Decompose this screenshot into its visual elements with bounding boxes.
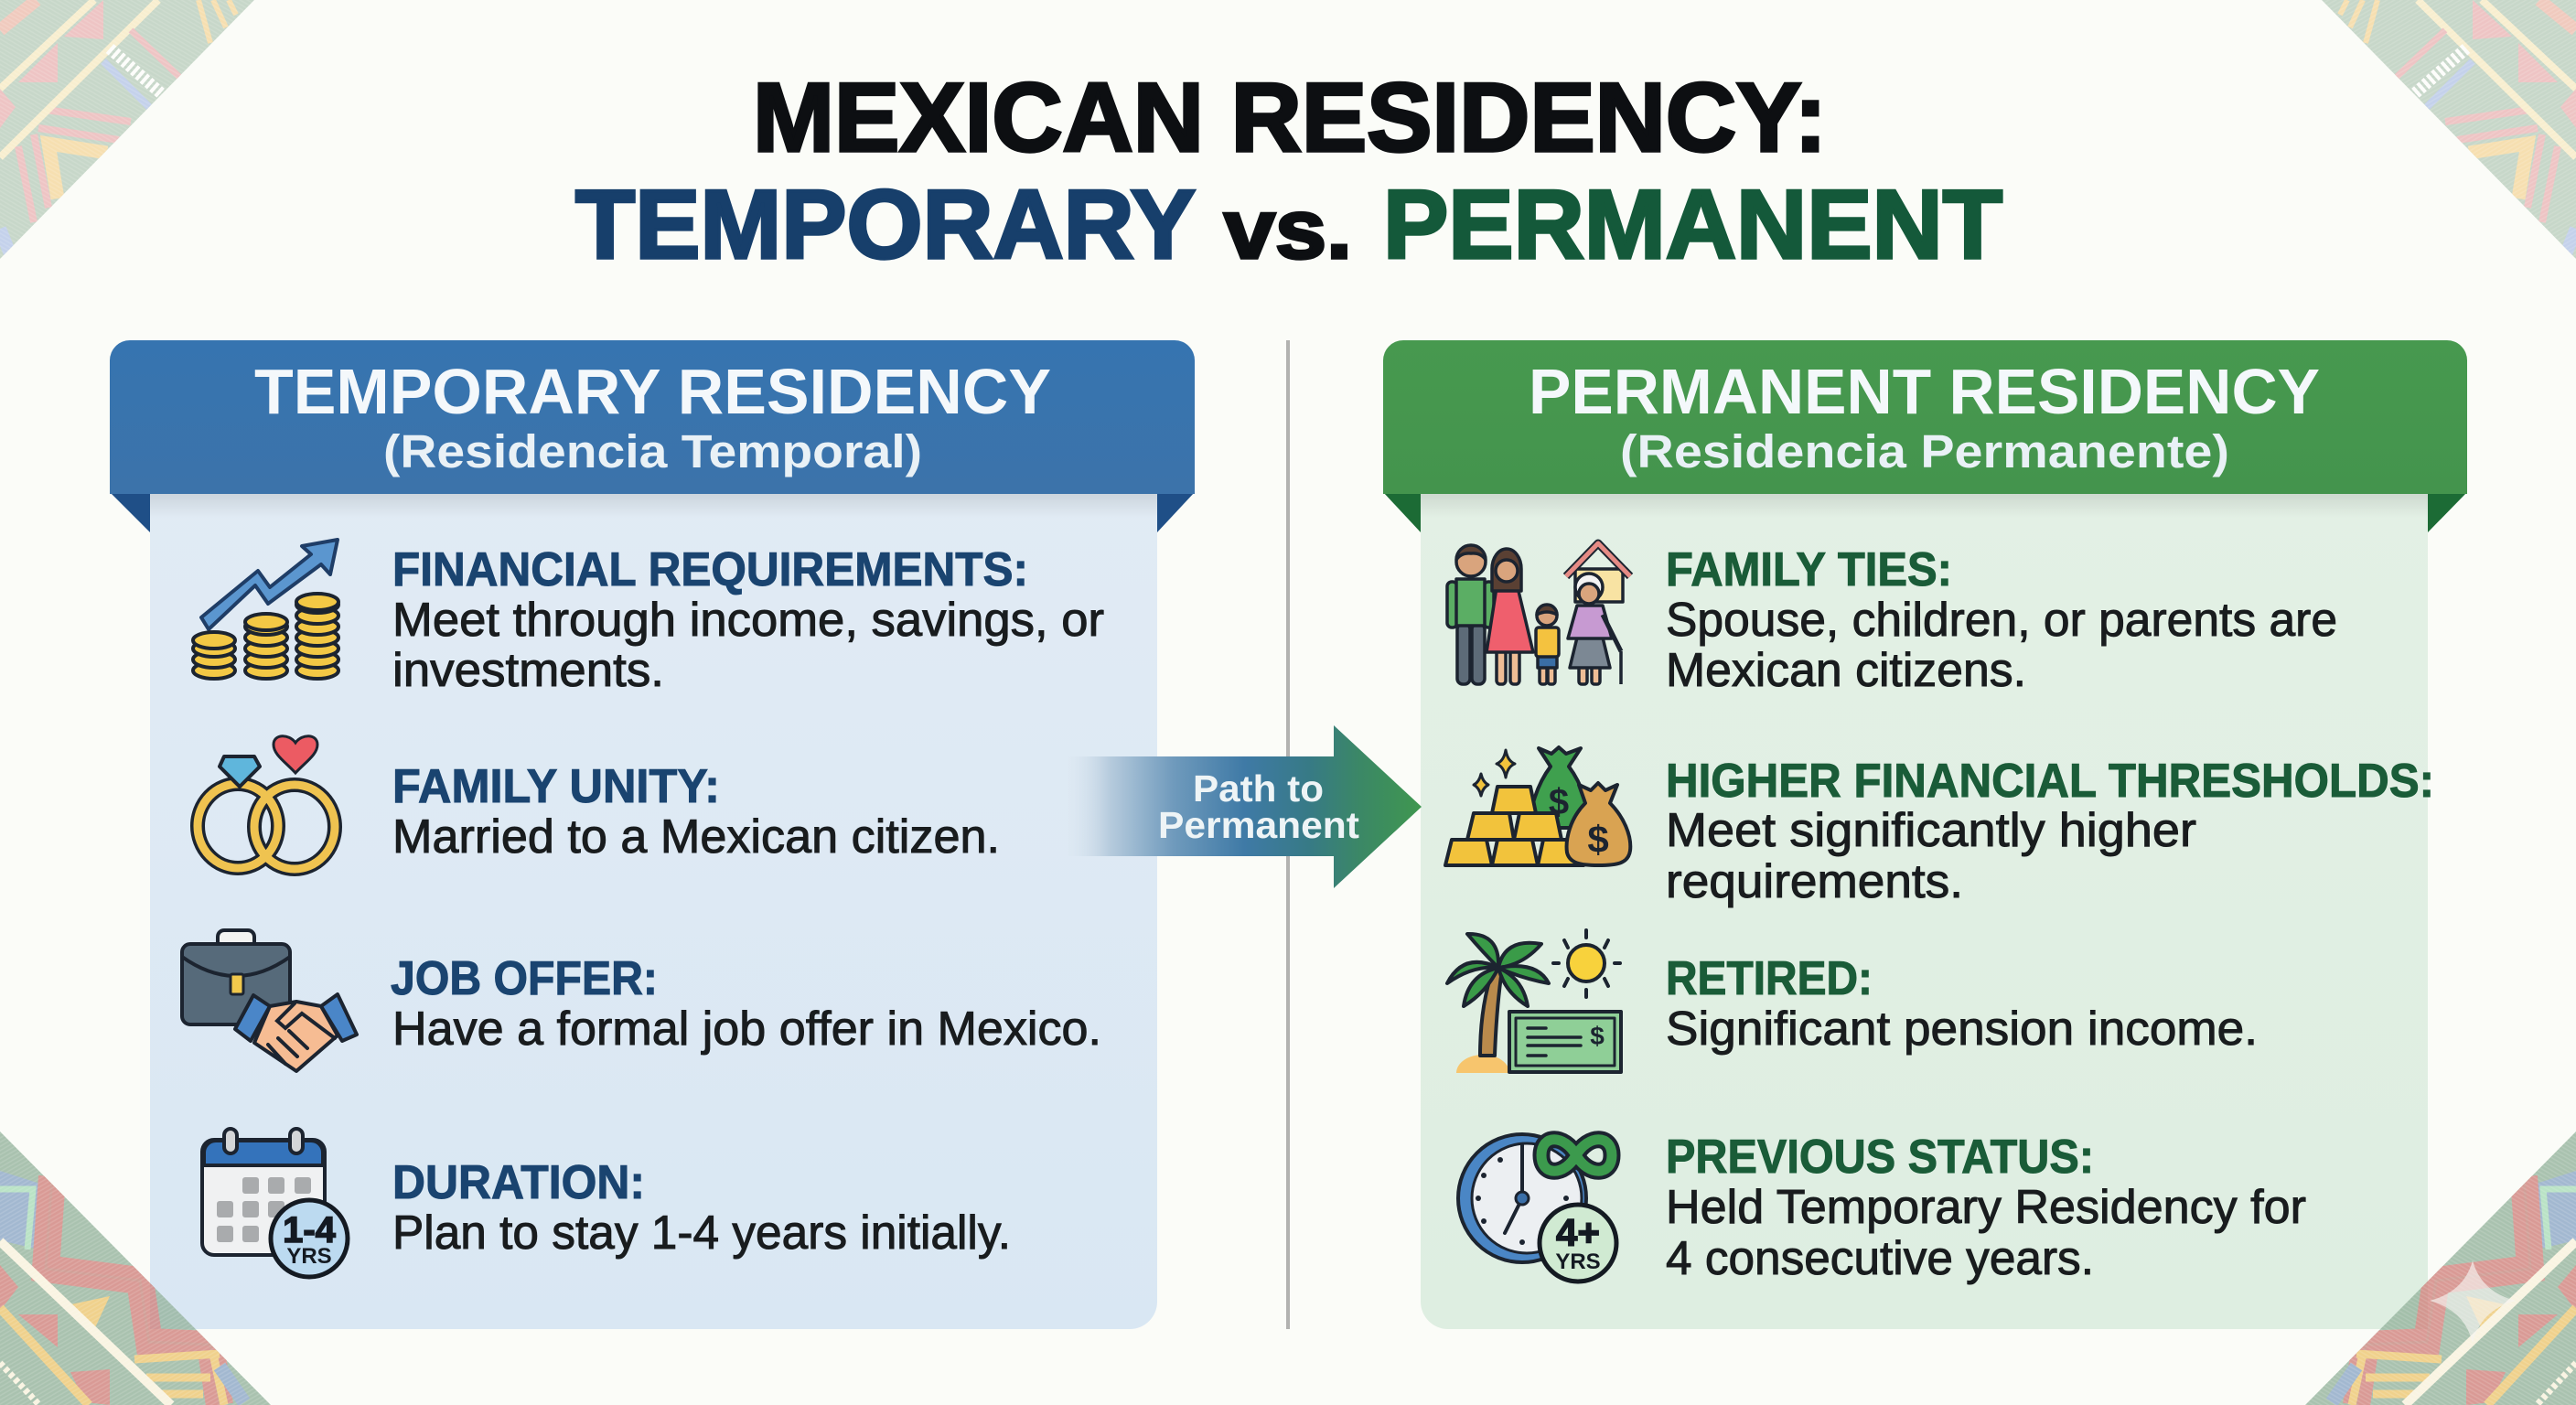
icon: family and house — [1447, 543, 1630, 684]
description: Meet significantly higher — [1666, 804, 2196, 857]
arrow: path to permanent — [1068, 725, 1422, 888]
description: investments. — [392, 644, 664, 697]
title word: permanent: PERMANENT — [1383, 169, 2002, 279]
description: Mexican citizens. — [1666, 644, 2026, 697]
center divider — [1286, 340, 1290, 1329]
header banner — [1383, 340, 2467, 494]
description — [1666, 1181, 2306, 1285]
icon: clock, infinity and 4+ yrs badge: 4+ — [1556, 1211, 1600, 1254]
heading: FINANCIAL REQUIREMENTS: — [392, 543, 1028, 596]
arrow label — [1158, 767, 1359, 846]
header subtitle: (Residencia Temporal) — [383, 425, 922, 477]
description: 4 consecutive years. — [1666, 1232, 2094, 1285]
item: job offer — [182, 930, 1101, 1071]
sparkle watermark — [2430, 1260, 2516, 1343]
title word: temporary: TEMPORARY — [575, 169, 1196, 279]
heading: RETIRED: — [1666, 952, 1873, 1005]
icon: clock, infinity and 4+ yrs badge — [1458, 1134, 1616, 1282]
description: Plan to stay 1-4 years initially. — [392, 1207, 1011, 1260]
description — [1666, 804, 2196, 908]
item: financial requirements — [193, 540, 1104, 697]
heading: PREVIOUS STATUS: — [1666, 1131, 2094, 1184]
description: Significant pension income. — [1666, 1003, 2258, 1056]
description: Meet through income, savings, or — [392, 594, 1104, 647]
description: requirements. — [1666, 855, 1963, 908]
title word: vs.: vs. — [1224, 183, 1352, 276]
heading: HIGHER FINANCIAL THRESHOLDS: — [1666, 755, 2434, 808]
icon: calendar with 1-4 yrs badge: 1-4 — [283, 1210, 337, 1250]
icon: gold bars and money bags: $ — [1549, 782, 1569, 822]
arrow label: Path to — [1193, 767, 1324, 810]
ribbon folds — [110, 492, 1195, 532]
header banner — [110, 340, 1195, 494]
panel body — [150, 485, 1157, 1329]
description: Have a formal job offer in Mexico. — [392, 1003, 1101, 1056]
description — [392, 594, 1104, 697]
description — [1666, 594, 2337, 697]
panel: permanent residency — [1383, 340, 2467, 1329]
panel body — [1421, 485, 2428, 1329]
header title: TEMPORARY RESIDENCY — [254, 356, 1051, 427]
item: retired — [1447, 930, 2258, 1073]
header subtitle: (Residencia Permanente) — [1620, 425, 2229, 477]
ribbon folds — [1383, 492, 2467, 532]
icon: briefcase and handshake — [182, 930, 357, 1071]
decorative textile corner: top right — [2302, 0, 2576, 274]
icon: gold bars and money bags — [1445, 747, 1630, 865]
icon: coins and rising arrow — [193, 540, 338, 679]
decorative textile corner: bottom right — [2302, 1131, 2576, 1405]
icon: palm tree, sun and pension check — [1447, 930, 1621, 1073]
title — [575, 62, 2002, 279]
panel: temporary residency — [110, 340, 1195, 1329]
item: previous status — [1458, 1131, 2306, 1285]
icon: calendar with 1-4 yrs badge: YRS — [286, 1244, 332, 1269]
header title: PERMANENT RESIDENCY — [1529, 356, 2320, 427]
heading: FAMILY TIES: — [1666, 543, 1952, 596]
icon: clock, infinity and 4+ yrs badge: YRS — [1555, 1249, 1601, 1274]
item: higher financial thresholds — [1445, 747, 2434, 908]
description: Married to a Mexican citizen. — [392, 810, 1000, 863]
title line 1: MEXICAN RESIDENCY: — [753, 62, 1827, 172]
arrow label: Permanent — [1158, 804, 1359, 846]
heading: DURATION: — [392, 1156, 645, 1209]
decorative textile corner: bottom left — [0, 1131, 274, 1405]
item: duration — [202, 1129, 1011, 1277]
icon: gold bars and money bags: $ — [1587, 818, 1609, 861]
icon: palm tree, sun and pension check: $ — [1590, 1022, 1605, 1050]
decorative textile corner: top left — [0, 0, 274, 274]
description: Held Temporary Residency for — [1666, 1181, 2306, 1234]
item: family unity — [198, 736, 1000, 869]
heading: JOB OFFER: — [391, 952, 658, 1005]
item: family ties — [1447, 543, 2337, 697]
icon: calendar with 1-4 yrs badge — [202, 1129, 348, 1277]
heading: FAMILY UNITY: — [392, 760, 720, 813]
description: Spouse, children, or parents are — [1666, 594, 2337, 647]
icon: wedding rings and heart — [198, 736, 335, 869]
